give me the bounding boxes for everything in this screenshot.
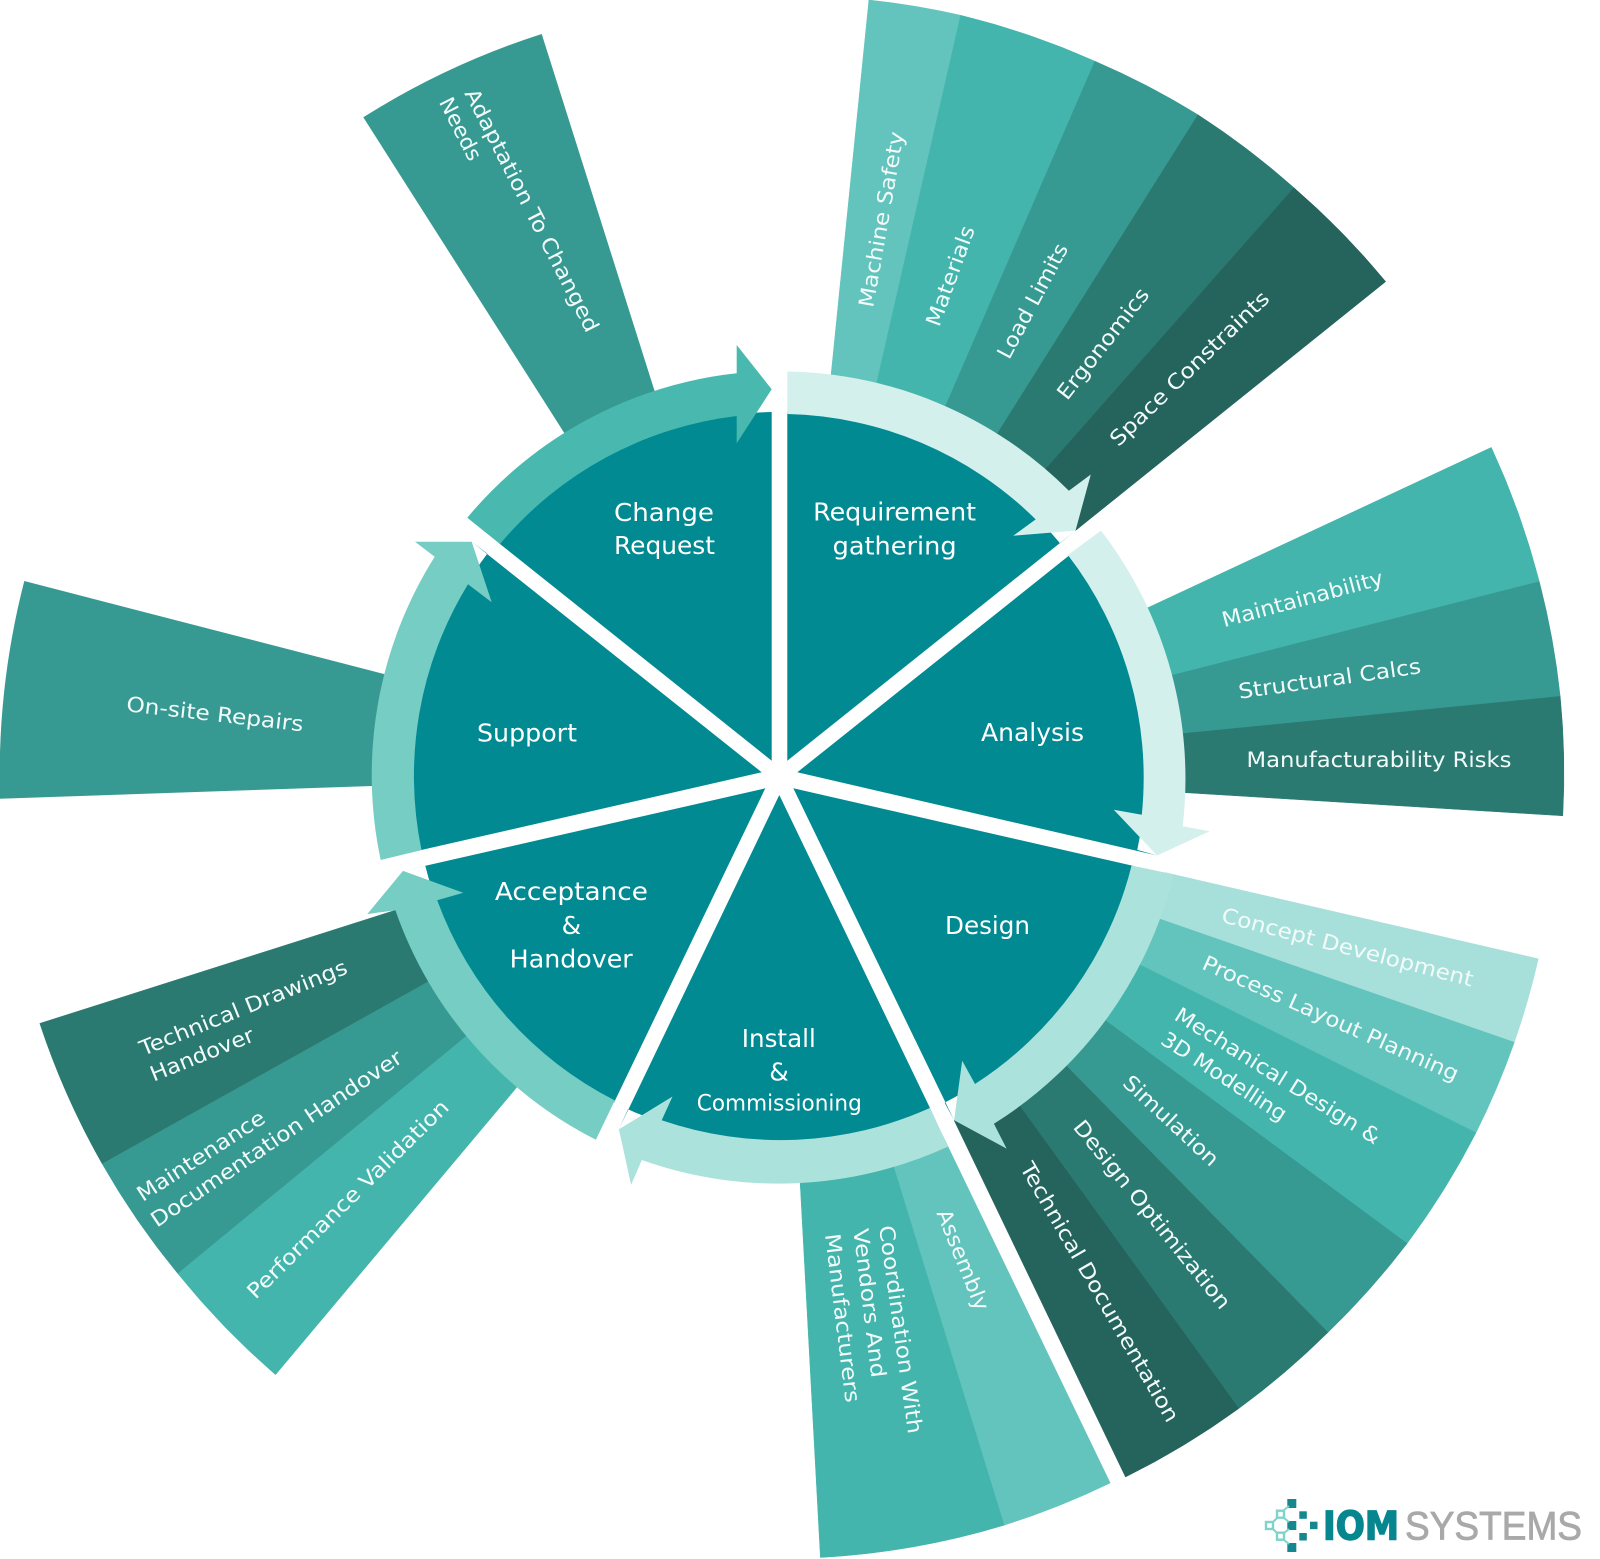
fan: Design sub-items <box>954 872 1538 1477</box>
segment: Process Layout Planning <box>1129 916 1514 1133</box>
label: Vendors And: Vendors And <box>848 1227 890 1379</box>
heading: Install: Install <box>742 1024 816 1053</box>
segment: Coordination <box>800 1158 1004 1558</box>
label: Technical Drawings: Technical Drawings <box>135 955 351 1061</box>
label: Handover: Handover <box>147 1023 258 1086</box>
wedge: Design <box>793 788 1133 1120</box>
arrow: Support <box>372 542 492 860</box>
segment: Technical Drawings Handover <box>40 907 436 1164</box>
segment: Assembly <box>891 1136 1110 1525</box>
label: Coordination With: Coordination With <box>874 1224 927 1435</box>
segment: Simulation <box>1059 1014 1407 1332</box>
label: Documentation Handover: Documentation Handover <box>146 1045 407 1232</box>
label: Maintenance: Maintenance <box>132 1106 270 1206</box>
wedge: Requirement gathering <box>787 412 1076 761</box>
heading: Change Request: Request <box>614 531 715 560</box>
segment: Design Optimization <box>1013 1059 1328 1408</box>
arrow: Install and Commissioning <box>619 1096 948 1185</box>
segment: Adaptation To Changed Needs <box>363 34 658 442</box>
heading: Requirement gathering: gathering <box>833 532 957 561</box>
segment: Structural Calcs <box>1163 582 1560 734</box>
label: Ergonomics: Ergonomics <box>1052 283 1154 404</box>
label: Mechanical Design &: Mechanical Design & <box>1170 1003 1385 1149</box>
heading: Acceptance and Handover: & <box>562 911 581 940</box>
segment: Maintenance Documentation Handover <box>102 977 474 1273</box>
central wheel wedges <box>403 389 1157 1142</box>
label: Assembly: Assembly <box>932 1206 994 1314</box>
wedge: Analysis <box>797 555 1157 856</box>
segment: Concept Development <box>1151 872 1538 1042</box>
label: Concept Development: Concept Development <box>1219 903 1476 991</box>
arrow: Analysis <box>1068 531 1210 856</box>
fan: Support sub-items <box>0 581 397 799</box>
segment: Materials <box>875 15 1095 414</box>
label: Adaptation To Changed: Adaptation To Changed <box>460 85 604 336</box>
curved arrows around the wheel <box>367 345 1210 1185</box>
segment: Ergonomics <box>993 115 1294 476</box>
fan: Requirement gathering sub-items <box>830 0 1386 531</box>
wedge: Support <box>412 542 762 850</box>
label: Space Constraints: Space Constraints <box>1105 286 1274 451</box>
logo wordmark: SYSTEMS: SYSTEMS <box>1405 1505 1582 1549</box>
heading: Commissioning: Commissioning <box>697 1092 862 1116</box>
label: Structural Calcs: Structural Calcs <box>1237 654 1422 704</box>
wedge: Acceptance and Handover <box>403 788 765 1103</box>
label: Load Limits: Load Limits <box>992 239 1073 363</box>
logo: IOM Systems <box>1266 1499 1582 1552</box>
arrow: Design <box>954 866 1174 1149</box>
label: Materials: Materials <box>921 223 980 329</box>
heading: Acceptance and Handover: Acceptance <box>495 877 648 906</box>
label: Maintainability: Maintainability <box>1219 566 1386 632</box>
segment: Machine Safety <box>830 0 961 392</box>
label: Manufacturability Risks: Manufacturability Risks <box>1246 748 1512 772</box>
heading: Analysis: Analysis <box>981 718 1084 747</box>
segment: Mechanical Design and 3D Modelling <box>1096 959 1476 1244</box>
label: 3D Modelling: 3D Modelling <box>1157 1027 1291 1126</box>
label: On-site Repairs: On-site Repairs <box>125 692 305 736</box>
label: Needs: Needs <box>434 93 486 165</box>
segment: Maintainability <box>1139 447 1539 678</box>
arrow: Change Request <box>467 345 772 544</box>
label: Process Layout Planning: Process Layout Planning <box>1199 951 1462 1086</box>
logo icon: pixel diamond <box>1266 1499 1318 1552</box>
fan: Install and Commissioning sub-items <box>800 1136 1110 1558</box>
heading: Change Request: Change <box>614 498 714 527</box>
logo wordmark: IOM: IOM <box>1323 1505 1399 1550</box>
segment: Technical Documentation <box>954 1097 1239 1477</box>
heading: Design: Design <box>945 911 1030 940</box>
fan: Analysis sub-items <box>1139 447 1564 816</box>
fan: Acceptance and Handover sub-items <box>40 907 523 1375</box>
label: Design Optimization: Design Optimization <box>1068 1115 1236 1314</box>
label: Technical Documentation: Technical Documentation <box>1015 1157 1184 1426</box>
label: Performance Validation: Performance Validation <box>242 1095 454 1304</box>
heading: ampersand: & <box>769 1058 789 1086</box>
heading: Support: Support <box>477 719 577 748</box>
heading: Acceptance and Handover: Handover <box>510 944 633 974</box>
label: Manufacturers: Manufacturers <box>820 1232 865 1404</box>
label: Simulation: Simulation <box>1118 1070 1224 1171</box>
stage labels <box>477 497 1084 1116</box>
arrow: Acceptance and Handover <box>367 871 615 1140</box>
label: Machine Safety: Machine Safety <box>854 130 909 309</box>
fan: Change Request sub-items <box>363 34 658 442</box>
segment: Load Limits <box>942 61 1198 441</box>
segment: Manufacturability Risks <box>1173 696 1564 816</box>
segment: Performance Validation <box>178 1030 523 1375</box>
wedge: Change Request <box>499 389 772 761</box>
wedge: Install and Commissioning <box>619 795 931 1142</box>
segment: On-site Repairs <box>0 581 397 799</box>
arrow: Requirement gathering <box>787 372 1091 536</box>
segment: Space Constraints <box>1040 188 1386 531</box>
heading: Requirement gathering: Requirement <box>813 497 976 526</box>
